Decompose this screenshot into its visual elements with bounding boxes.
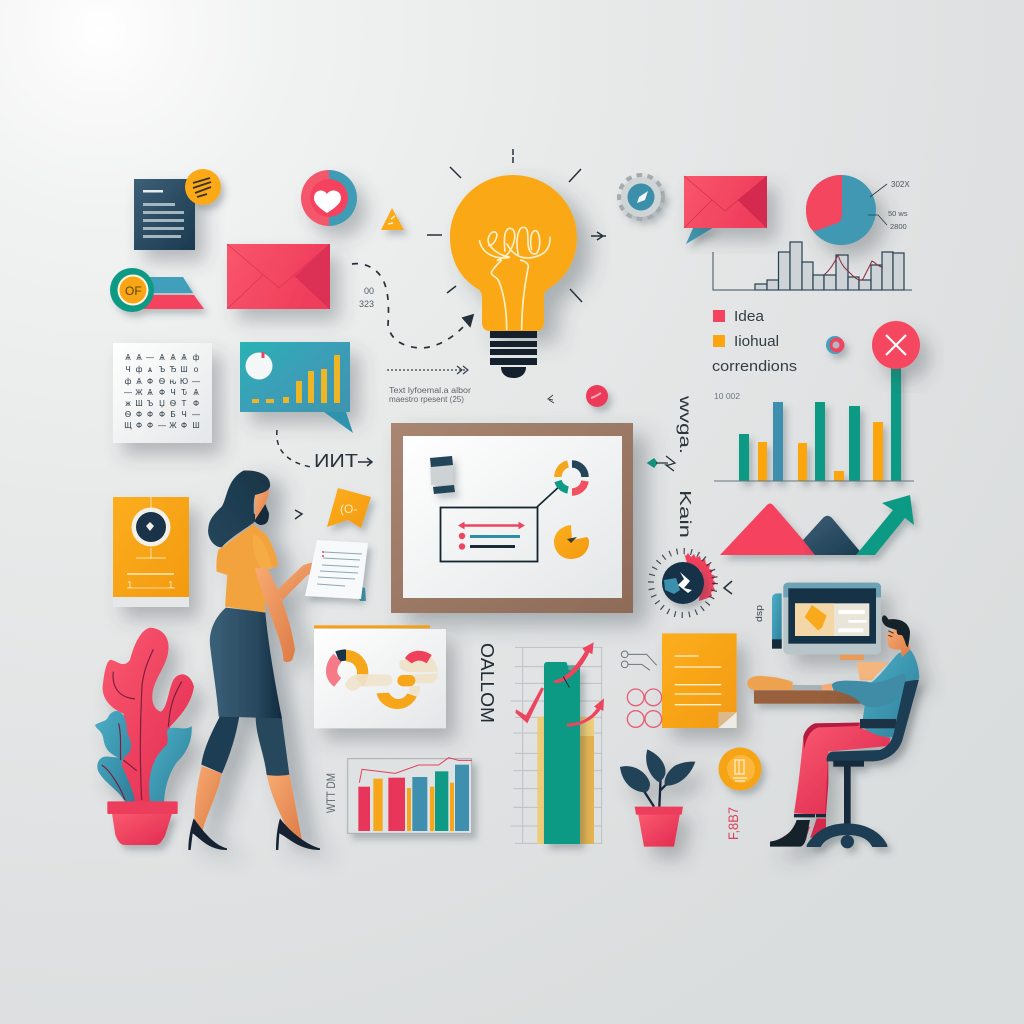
legend: Idea xyxy=(734,309,765,325)
icon: gauge xyxy=(651,551,716,615)
pants xyxy=(794,723,891,815)
icon: coral plant xyxy=(95,628,194,845)
text: rotated labels: wvga. xyxy=(676,395,693,454)
hair behind and face xyxy=(253,489,269,525)
icon: large envelope xyxy=(227,244,330,309)
panel: symbol grid: Б xyxy=(170,410,176,419)
icon: small glyph and red ball xyxy=(548,385,608,407)
hair xyxy=(882,615,910,647)
boot xyxy=(794,814,826,817)
far leg xyxy=(817,752,828,815)
panel: symbol grid: Ѳ xyxy=(125,410,131,419)
panel: symbol grid: Ѧ xyxy=(147,388,153,397)
text: rotated labels: Kain xyxy=(676,490,693,538)
panel: symbol grid: — xyxy=(192,377,200,386)
chart: bar chart with close marker xyxy=(714,321,920,481)
text: rotated small labels: dsp xyxy=(754,605,764,622)
panel: symbol grid: Ђ xyxy=(170,365,177,374)
panel: orange poster: 1 xyxy=(127,580,133,591)
panel: symbol grid: ф xyxy=(136,365,143,374)
panel: mixed bar chart xyxy=(348,758,472,833)
icon: potted plant xyxy=(620,749,695,847)
body xyxy=(770,615,919,847)
panel: symbol grid: Ѳ xyxy=(159,377,165,386)
icon: heart donut xyxy=(301,170,357,226)
icon: light bulb xyxy=(450,175,577,378)
panel: symbol grid xyxy=(113,343,212,443)
panel: symbol grid: — xyxy=(158,421,166,430)
legend: correndions xyxy=(712,359,797,375)
icon: message envelope xyxy=(684,176,767,244)
desk xyxy=(747,676,861,704)
panel: symbol grid: Ж xyxy=(135,388,143,397)
calves xyxy=(195,766,222,831)
panel: symbol grid: Ф xyxy=(159,388,165,397)
panel: symbol grid: Ч xyxy=(170,388,176,397)
panel: symbol grid: Ѳ xyxy=(170,399,176,408)
torso xyxy=(862,649,919,738)
panel: symbol grid: Ю xyxy=(180,377,188,386)
icon: stacked badge: OF xyxy=(125,284,142,298)
icon: gear xyxy=(620,176,662,218)
text: small numbers xyxy=(359,286,374,309)
panel: held paper xyxy=(305,540,368,601)
panel: symbol grid: Ԏ xyxy=(181,388,187,397)
text: caption: Text lyfoemal.a albor xyxy=(389,386,471,395)
arrow: dashed loop with label: ИИТ xyxy=(314,451,358,471)
panel: speech bubble bar chart xyxy=(240,342,353,433)
skirt xyxy=(210,608,282,718)
chart: mountains with arrow xyxy=(720,495,914,555)
panel: symbol grid: Ш xyxy=(192,421,200,430)
panel: symbol grid: Ъ xyxy=(159,365,165,374)
text: small numbers: 323 xyxy=(359,299,374,309)
panel: symbol grid: Ѧ xyxy=(136,353,142,362)
panel: symbol grid: Ф xyxy=(193,399,199,408)
panel: symbol grid: — xyxy=(192,410,200,419)
icon: figure man at desk xyxy=(747,583,919,848)
panel: symbol grid: Ф xyxy=(181,421,187,430)
panel: document card xyxy=(134,169,221,250)
shoes xyxy=(188,818,227,850)
text: rotated labels xyxy=(676,395,693,538)
line: connector xyxy=(537,484,562,507)
panel: list box xyxy=(440,508,538,562)
panel: symbol grid: Ф xyxy=(147,377,153,386)
text: rotated small labels xyxy=(326,605,764,840)
monitor xyxy=(783,583,881,654)
arm xyxy=(255,567,295,662)
panel: symbol grid: Ш xyxy=(135,399,143,408)
panel: symbol grid: Ѧ xyxy=(170,353,176,362)
panel: symbol grid: Ч xyxy=(125,365,131,374)
panel: symbol grid: — xyxy=(146,353,154,362)
panel: donut card xyxy=(314,625,446,728)
panel: orange poster: 1 xyxy=(168,580,174,591)
torso xyxy=(216,524,278,613)
chart: donut left xyxy=(332,655,363,682)
panel: symbol grid: Ф xyxy=(147,410,153,419)
icon: figure woman xyxy=(188,471,325,850)
panel: symbol grid: Щ xyxy=(124,421,132,430)
panel: orange poster xyxy=(113,497,189,607)
panel: symbol grid: Ш xyxy=(180,365,188,374)
icon: ring xyxy=(826,336,844,354)
legend xyxy=(712,309,797,375)
chart: tall growth column xyxy=(511,642,604,844)
panel: symbol grid: Ф xyxy=(136,421,142,430)
icon: tag xyxy=(327,488,371,528)
text: rotated small labels: WTT DM xyxy=(326,773,338,813)
side bar xyxy=(772,593,782,648)
neck and face xyxy=(887,628,910,657)
arrow: small chevron xyxy=(295,510,302,519)
icon: teal arrow xyxy=(648,456,675,471)
icon: glasses and lines xyxy=(621,651,662,727)
panel: symbol grid: ж xyxy=(125,399,131,408)
icon: warning triangle xyxy=(381,208,404,230)
panel: symbol grid: Ч xyxy=(181,410,187,419)
panel: symbol grid: Ф xyxy=(136,410,142,419)
panel: symbol grid: ф xyxy=(193,353,200,362)
panel: symbol grid: Ѧ xyxy=(193,388,199,397)
panel: symbol grid: Ѧ xyxy=(181,353,187,362)
icon: stacked badge xyxy=(110,268,204,312)
panel: symbol grid: ф xyxy=(125,377,132,386)
icon: orange pie xyxy=(554,525,589,559)
panel: symbol grid: Т xyxy=(182,399,187,408)
panel: symbol grid: Ѧ xyxy=(125,353,131,362)
legend: Iiohual xyxy=(734,334,779,350)
panel: symbol grid: о xyxy=(194,365,199,374)
chart: linked shapes xyxy=(345,674,392,691)
text: caption xyxy=(389,386,471,404)
text: caption: maestro rpesent (25) xyxy=(389,395,464,404)
arm xyxy=(822,683,833,691)
panel: symbol grid: Ф xyxy=(147,421,153,430)
leggings xyxy=(201,716,239,773)
panel: framed board xyxy=(391,423,633,613)
chair xyxy=(807,679,919,848)
stand xyxy=(840,655,864,660)
chart: pie with leaders: 50 ws xyxy=(888,209,908,218)
panel: symbol grid: Џ xyxy=(159,399,165,408)
arrow: dashed loop with label xyxy=(277,430,372,471)
icon: device xyxy=(430,456,455,494)
chart: pie with leaders: 2800 xyxy=(890,222,907,231)
panel: symbol grid: Ѧ xyxy=(136,377,142,386)
chart: pie with leaders: 302X xyxy=(891,180,910,189)
forearm right xyxy=(275,563,325,600)
panel: symbol grid: ԋ xyxy=(169,377,177,386)
icon: orange coin xyxy=(718,748,762,790)
chart: pie with leaders xyxy=(806,175,910,245)
filament xyxy=(479,227,550,330)
text: rotated small labels: OALLOM xyxy=(477,643,497,723)
hair xyxy=(208,471,270,547)
panel: symbol grid: Ъ xyxy=(147,399,153,408)
icon: tag: (O- xyxy=(340,502,357,516)
panel: symbol grid: — xyxy=(124,388,132,397)
icon: bulb rays xyxy=(427,149,606,302)
chart: donut xyxy=(558,464,585,492)
arrow: gauge pointer xyxy=(724,581,732,594)
panel: symbol grid: ѧ xyxy=(148,365,152,374)
chart: bar chart with close marker: 10 002 xyxy=(714,391,740,401)
arrow: dashed curve to bulb xyxy=(352,264,473,348)
panel: symbol grid: Ѧ xyxy=(159,353,165,362)
panel: symbol grid: Ф xyxy=(159,410,165,419)
chart: histogram with trend xyxy=(713,242,912,290)
text: small numbers: 00 xyxy=(364,286,374,296)
arrow: dotted arrow xyxy=(387,366,468,374)
text: rotated small labels: F,8B7 xyxy=(725,807,741,840)
panel: sticky note xyxy=(662,633,737,728)
panel: symbol grid: Ж xyxy=(169,421,177,430)
